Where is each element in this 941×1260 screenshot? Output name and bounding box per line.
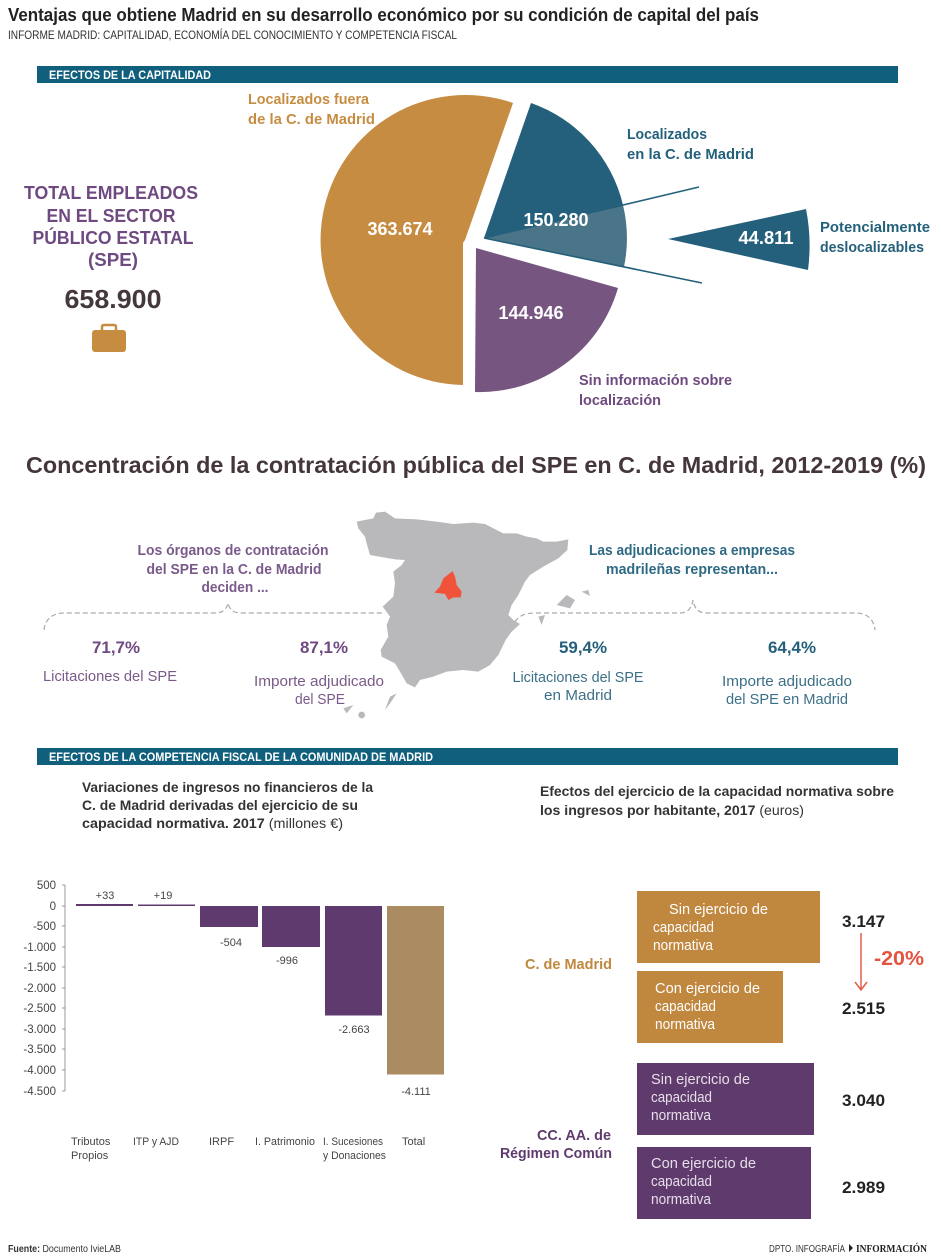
bar: Total: -4.111	[401, 1086, 431, 1098]
text: organos de contratacion: del SPE en la C. de Madrid	[146, 562, 322, 578]
panel: total empleados: (SPE)	[88, 250, 138, 270]
label: localizados en Madrid	[627, 126, 754, 163]
bar: I. Sucesiones y Donaciones: I. Sucesiones	[323, 1136, 383, 1148]
value: 144.946: 144.946	[498, 303, 564, 323]
bar: ITP y AJD	[133, 890, 195, 1148]
bar: Total: Total	[402, 1136, 425, 1148]
section header: efectos de la capitalidad	[37, 66, 898, 83]
panel: total empleados: 658.900	[64, 284, 162, 314]
icon: briefcase	[92, 325, 126, 352]
label: potencialmente deslocalizables: deslocalizables	[820, 239, 924, 256]
text: adjudicaciones: Las adjudicaciones a empresas	[589, 543, 795, 559]
label: CC. AA. de Regimen Comun	[500, 1127, 612, 1162]
label: localizados fuera: de la C. de Madrid	[248, 111, 375, 128]
label: localizados en Madrid: Localizados	[627, 126, 707, 143]
y axis	[23, 880, 65, 1098]
label: CC. AA. de Regimen Comun: Régimen Común	[500, 1145, 612, 1162]
y axis: -2.500	[23, 1003, 56, 1015]
label: sin informacion: Sin información sobre	[579, 372, 732, 389]
credit: INFORMACIÓN	[856, 1243, 927, 1255]
bar: Total	[387, 906, 444, 1148]
stat: 64,4%: Importe adjudicado	[722, 673, 852, 690]
label: localizados en Madrid: en la C. de Madrid	[627, 146, 754, 163]
box: Madrid con ejercicio: Con ejercicio de	[655, 980, 760, 997]
bar: I. Patrimonio	[255, 906, 320, 1148]
bar: I. Sucesiones y Donaciones	[323, 906, 386, 1162]
y axis: -2.000	[23, 983, 56, 995]
y axis: 500	[37, 880, 56, 892]
value: 363.674: 363.674	[368, 219, 432, 239]
exploded slice	[668, 209, 810, 270]
pie chart	[321, 95, 810, 392]
map of Spain	[343, 512, 590, 718]
dashed brace left	[44, 603, 385, 630]
value: 150.280: 150.280	[524, 210, 588, 230]
value: 44.811: 44.811	[738, 228, 794, 248]
box: Madrid con ejercicio	[637, 971, 783, 1043]
bar: I. Patrimonio: I. Patrimonio	[255, 1136, 315, 1148]
panel: total empleados: TOTAL EMPLEADOS	[24, 183, 198, 203]
value: 2.989: 2.989	[842, 1178, 885, 1197]
label: localizados fuera	[248, 91, 375, 128]
bar: Tributos Propios	[71, 890, 133, 1162]
box: regimen comun con ejercicio: Con ejercicio de	[651, 1155, 756, 1172]
section header: efectos de la capitalidad: EFECTOS DE LA CAPITALIDAD	[49, 70, 211, 82]
y axis: -1.500	[23, 962, 56, 974]
label: C. de Madrid: C. de Madrid	[525, 956, 612, 973]
stat: 71,7%: Licitaciones del SPE	[43, 668, 177, 685]
chart heading: variaciones	[82, 779, 373, 831]
stat: 64,4%: 64,4%	[768, 638, 816, 657]
callout: -20%: -20%	[874, 948, 924, 970]
y axis: -3.000	[23, 1024, 56, 1036]
bar chart	[23, 880, 444, 1162]
bar: IRPF: -504	[220, 937, 242, 949]
pie slice: localizados en Madrid	[484, 103, 623, 238]
box: regimen comun sin ejercicio: normativa	[651, 1107, 712, 1124]
box: Madrid sin ejercicio: normativa	[653, 937, 714, 954]
stat: 71,7%: 71,7%	[92, 638, 140, 657]
stat: 71,7%	[43, 638, 177, 685]
lines to exploded slice	[484, 187, 702, 283]
panel: total empleados: EN EL SECTOR	[46, 206, 176, 226]
pie slice: potencialmente deslocalizables, light section	[484, 205, 627, 267]
pie slice: localizados fuera	[321, 95, 513, 385]
bar: IRPF	[200, 906, 258, 1148]
box: Madrid con ejercicio: normativa	[655, 1016, 716, 1033]
label: localizados fuera: Localizados fuera	[248, 91, 370, 108]
bar: I. Patrimonio: -996	[276, 955, 298, 967]
bar: ITP y AJD: +19	[154, 890, 172, 902]
text: organos de contratacion: deciden ...	[202, 580, 268, 596]
stat: 64,4%: del SPE en Madrid	[726, 691, 848, 708]
box: regimen comun con ejercicio: normativa	[651, 1191, 712, 1208]
heading: concentracion: Concentración de la contratación pública del SPE en C. de Madrid, 2012-2019 (%)	[26, 452, 926, 478]
bar: IRPF: IRPF	[209, 1136, 234, 1148]
subtitle: INFORME MADRID: CAPITALIDAD, ECONOMÍA DEL CONOCIMIENTO Y COMPETENCIA FISCAL	[8, 27, 457, 42]
box: Madrid sin ejercicio: Sin ejercicio de	[669, 901, 768, 918]
credit: DPTO. INFOGRAFÍA	[769, 1242, 845, 1255]
box: regimen comun sin ejercicio: Sin ejercicio de	[651, 1071, 750, 1088]
chart heading: efectos: los ingresos por habitante, 2017 (euros)	[540, 802, 804, 818]
title: Ventajas que obtiene Madrid en su desarrollo económico por su condición de capital del país	[8, 4, 759, 25]
y axis: -500	[33, 921, 56, 933]
y axis: -3.500	[23, 1044, 56, 1056]
stat: 59,4%: Licitaciones del SPE	[512, 669, 644, 686]
y axis: 0	[50, 901, 56, 913]
stat: 87,1%	[254, 638, 384, 708]
label: potencialmente deslocalizables: Potencialmente	[820, 219, 930, 236]
chart heading: variaciones: capacidad normativa. 2017 (millones €)	[82, 815, 343, 831]
box: regimen comun sin ejercicio: capacidad	[651, 1089, 712, 1106]
box: regimen comun con ejercicio: capacidad	[651, 1173, 712, 1190]
box: Madrid sin ejercicio: capacidad	[653, 919, 714, 936]
value: 3.147: 3.147	[842, 912, 885, 931]
box: Madrid con ejercicio: capacidad	[655, 998, 716, 1015]
box: Madrid sin ejercicio	[637, 891, 820, 963]
bar: ITP y AJD: ITP y AJD	[133, 1136, 179, 1148]
stat: 59,4%: en Madrid	[544, 687, 612, 704]
stat: 87,1%: 87,1%	[300, 638, 348, 657]
y axis: -4.000	[23, 1065, 56, 1077]
text: organos de contratacion: Los órganos de contratación	[138, 543, 328, 559]
panel: total empleados: PÚBLICO ESTATAL	[32, 227, 194, 248]
text: adjudicaciones: madrileñas representan...	[606, 562, 778, 578]
stat: 59,4%	[512, 638, 644, 704]
stat: 64,4%	[722, 638, 852, 708]
section header: competencia fiscal	[37, 748, 898, 765]
section header: competencia fiscal: EFECTOS DE LA COMPETENCIA FISCAL DE LA COMUNIDAD DE MADRID	[49, 752, 433, 764]
chart heading: efectos	[540, 783, 894, 818]
value: 2.515: 2.515	[842, 999, 885, 1018]
pie slice: sin informacion	[475, 248, 618, 392]
stat: 87,1%: Importe adjudicado	[254, 673, 384, 690]
bar: Tributos Propios: Tributos	[71, 1136, 111, 1148]
value: 3.040: 3.040	[842, 1091, 885, 1110]
panel: total empleados	[24, 183, 198, 314]
label: potencialmente deslocalizables	[820, 219, 930, 256]
bar: Tributos Propios: Propios	[71, 1150, 109, 1162]
map region: Madrid	[434, 571, 462, 600]
text: adjudicaciones	[589, 543, 795, 578]
text: organos de contratacion	[138, 543, 328, 596]
bar: I. Sucesiones y Donaciones: y Donaciones	[323, 1150, 386, 1162]
source: Fuente: Documento IvieLAB	[8, 1244, 121, 1255]
bar: I. Sucesiones y Donaciones: -2.663	[338, 1024, 370, 1036]
chart heading: variaciones: Variaciones de ingresos no financieros de la	[82, 779, 373, 795]
label: sin informacion: localización	[579, 392, 661, 409]
box: regimen comun sin ejercicio	[637, 1063, 814, 1135]
label: sin informacion	[579, 372, 732, 409]
stat: 87,1%: del SPE	[295, 691, 345, 708]
stat: 59,4%: 59,4%	[559, 638, 607, 657]
y axis: -1.000	[23, 942, 56, 954]
label: CC. AA. de Regimen Comun: CC. AA. de	[537, 1127, 611, 1144]
y axis: -4.500	[23, 1086, 56, 1098]
dashed brace right	[515, 600, 875, 630]
credit	[769, 1242, 927, 1255]
chart heading: efectos: Efectos del ejercicio de la capacidad normativa sobre	[540, 783, 894, 799]
chart heading: variaciones: C. de Madrid derivadas del ejercicio de su	[82, 797, 358, 813]
arrow: decrease	[855, 933, 867, 990]
box: regimen comun con ejercicio	[637, 1147, 811, 1219]
bar: Tributos Propios: +33	[96, 890, 114, 902]
